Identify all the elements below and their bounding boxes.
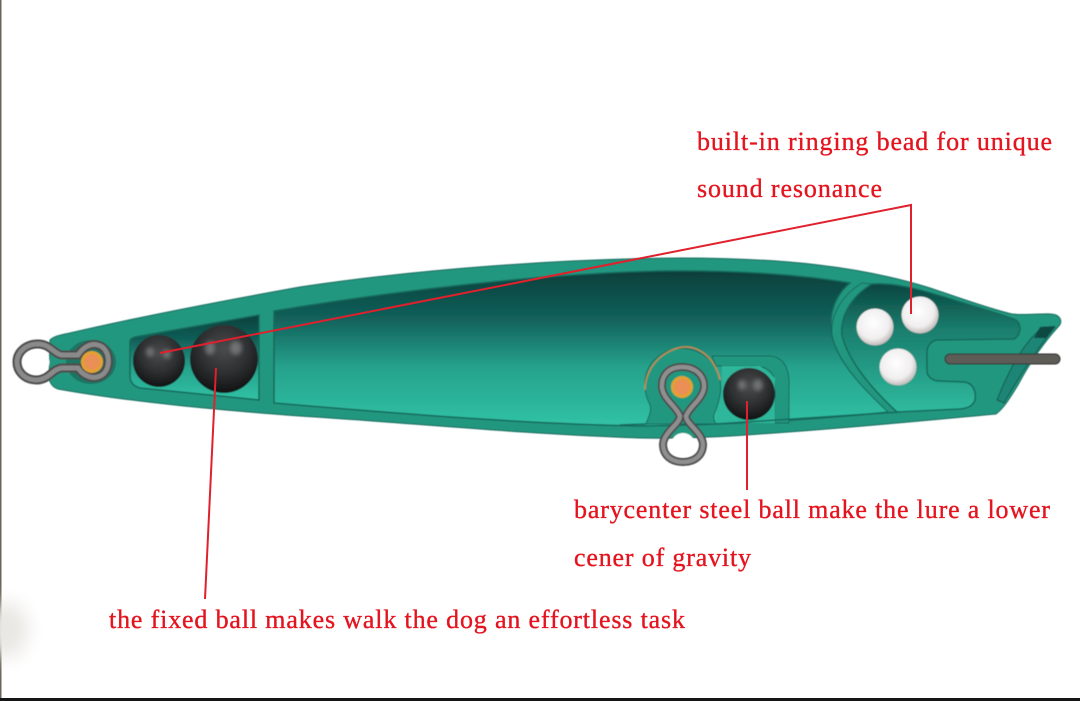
keel pocket [716,366,775,423]
ringing bead 1 [856,308,894,346]
weight housing [712,356,789,423]
fixed ball 1 [133,335,185,387]
main chamber [274,271,890,426]
fixed ball 2 [190,325,258,393]
rear bulkhead wall [832,283,897,413]
steel ball highlights [146,341,763,391]
keel boss [645,348,721,424]
label: ringing bead [697,127,1052,203]
rear chamber [842,284,1020,412]
floor lip [620,412,900,425]
label: ringing bead: built-in ringing bead for unique [697,127,1052,156]
label: barycenter steel ball [574,495,1050,572]
barycenter ball [723,368,775,420]
tail wire [945,354,1060,364]
tail tube [997,327,1055,403]
nose eyelet [17,344,108,380]
lure body [17,258,1061,462]
belly eyelet [662,367,704,462]
label: barycenter steel ball: barycenter steel ball make the lure a lower [574,495,1050,524]
label: barycenter steel ball: cener of gravity [574,543,751,572]
body shell [49,258,1061,438]
label: fixed ball: the fixed ball makes walk the dog an effortless task [109,605,685,634]
ringing bead 3 [880,348,916,386]
belly pin [671,376,693,398]
leader lines [160,205,911,599]
ringing bead 2 [902,296,938,334]
nose recess [66,340,116,384]
nose pin [81,351,103,373]
front chamber [130,315,259,400]
label: ringing bead: sound resonance [697,174,882,203]
